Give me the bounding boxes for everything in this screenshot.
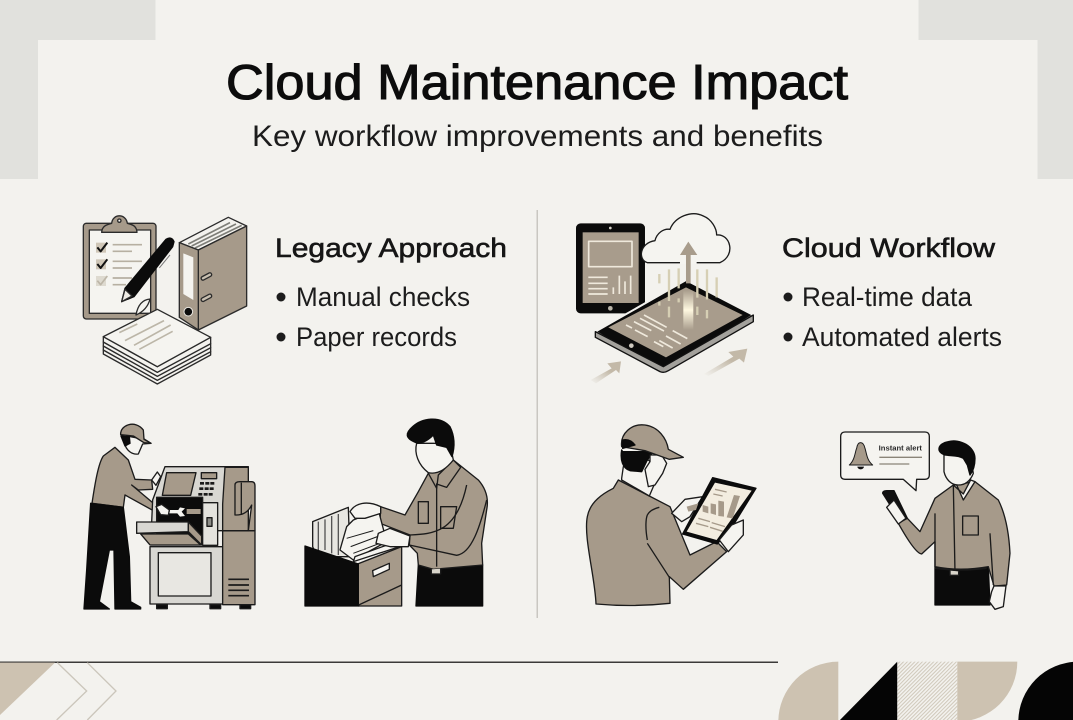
heading: Legacy Approach: Legacy Approach [275,233,507,263]
bottom rule [0,662,778,663]
illustration: technician repairing machine [84,424,255,609]
icon: tablets uploading to cloud [576,214,753,383]
decor: bottom left corner [0,663,116,720]
heading: Cloud Workflow: Cloud Workflow [782,233,996,263]
illustration: worker filing paper records [305,419,487,606]
illustration: technician reading tablet [586,425,756,605]
callout: instant alert bubble: Instant alert [879,446,923,453]
icon: clipboard, binder and papers [83,216,247,384]
title: Cloud Maintenance Impact [226,56,848,110]
divider [536,210,538,618]
corner block: top right [918,0,1073,179]
callout: instant alert bubble [841,432,929,491]
corner block: top left [0,0,156,179]
subtitle: Key workflow improvements and benefits [252,120,823,153]
list: legacy items [276,282,470,352]
decor: bottom right geometric shapes [778,662,1073,720]
list: cloud items [784,282,1002,352]
list: cloud items: Real-time data [802,282,973,312]
list: legacy items: Manual checks [296,282,470,312]
list: cloud items: Automated alerts [802,322,1002,352]
list: legacy items: Paper records [296,322,457,352]
illustration: worker receiving phone alert [841,432,1010,609]
